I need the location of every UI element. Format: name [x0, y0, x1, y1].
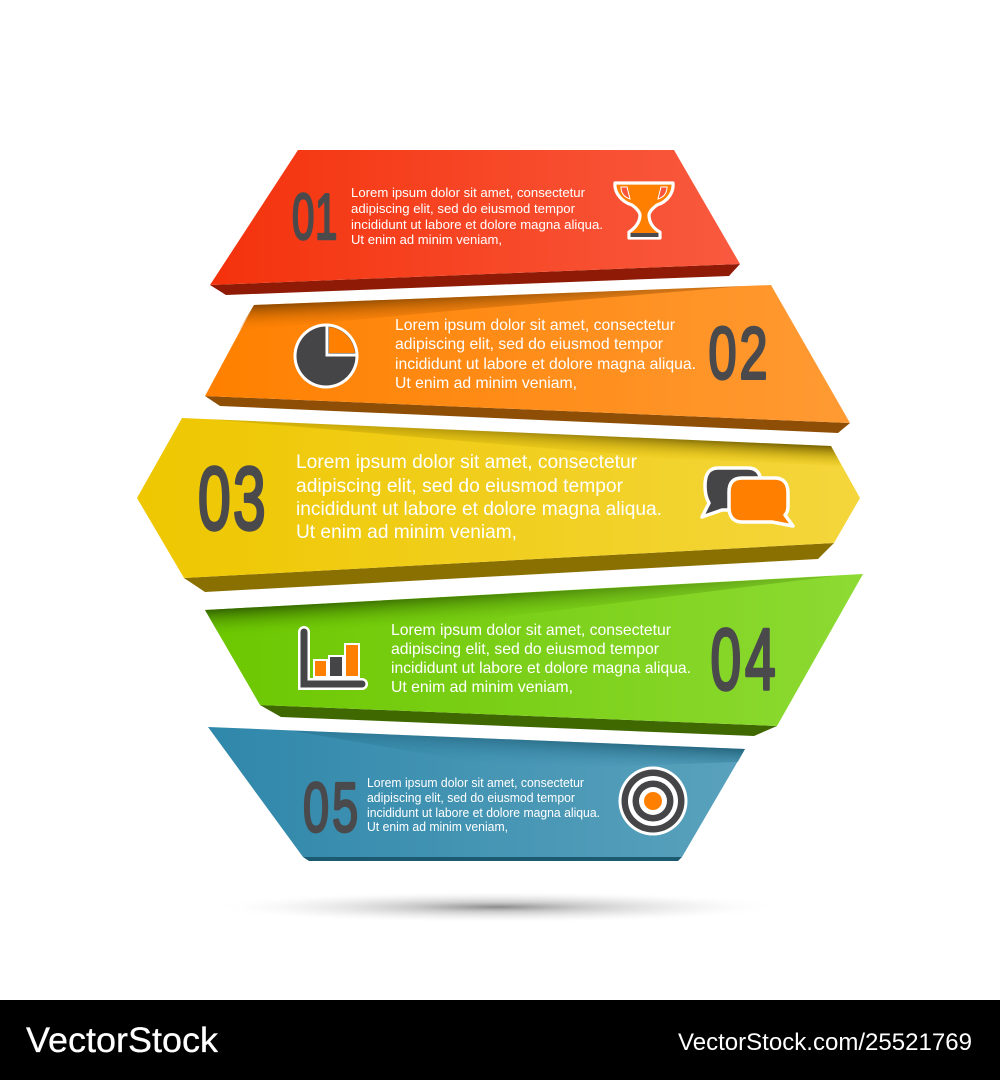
text block 02 [395, 317, 696, 392]
yellow band depth [184, 543, 834, 592]
top shadow yellow [210, 419, 842, 466]
icon: trophy [615, 183, 673, 238]
orange band face [205, 285, 850, 423]
text block 04: Ut enim ad minim veniam, [391, 679, 573, 696]
icon: target [618, 766, 688, 836]
text block 03: adipiscing elit, sed do eiusmod tempor [296, 475, 623, 497]
text block 02: adipiscing elit, sed do eiusmod tempor [395, 336, 663, 353]
text block 01: adipiscing elit, sed do eiusmod tempor [351, 201, 576, 216]
text block 01: Ut enim ad minim veniam, [351, 232, 502, 247]
ground shadow [209, 891, 785, 923]
red band depth [210, 264, 740, 295]
number 05: 05 [303, 768, 358, 847]
icon: bar chart [304, 632, 362, 684]
text block 04: incididunt ut labore et dolore magna aliqua. [391, 660, 691, 677]
panel: step 02 orange [205, 285, 850, 433]
text block 05: Lorem ipsum dolor sit amet, consectetur [367, 776, 584, 790]
text block 04 [391, 622, 691, 696]
footer url: VectorStock.com/25521769 [678, 1029, 972, 1056]
text block 02: Ut enim ad minim veniam, [395, 375, 577, 392]
icon: speech bubbles [702, 468, 793, 526]
text block 04: adipiscing elit, sed do eiusmod tempor [391, 641, 660, 658]
text block 02: incididunt ut labore et dolore magna aliqua. [395, 356, 696, 373]
text block 03 [296, 451, 662, 543]
footer bar [0, 1000, 1000, 1080]
text block 03: Lorem ipsum dolor sit amet, consectetur [296, 451, 637, 473]
text block 05: adipiscing elit, sed do eiusmod tempor [367, 791, 575, 805]
text block 01: incididunt ut labore et dolore magna aliqua. [351, 217, 603, 232]
panel: step 04 green [205, 574, 863, 736]
number 04: 04 [710, 613, 776, 708]
text block 03: Ut enim ad minim veniam, [296, 521, 517, 543]
text block 05 [367, 776, 600, 834]
panel: step 01 red [210, 150, 740, 295]
blue band depth [303, 857, 682, 861]
text block 05: incididunt ut labore et dolore magna aliqua. [367, 806, 600, 820]
blue band face [208, 727, 745, 857]
number 02: 02 [708, 313, 768, 395]
footer logo: VectorStock [26, 1021, 219, 1060]
green band depth [260, 705, 777, 736]
green band face [205, 574, 863, 726]
top shadow blue [290, 730, 745, 764]
panel: step 03 yellow [137, 418, 860, 592]
red band face [210, 150, 740, 285]
number 01: 01 [292, 181, 337, 253]
icon: pie chart [294, 324, 358, 388]
top shadow green [205, 576, 835, 640]
text block 01: Lorem ipsum dolor sit amet, consectetur [351, 185, 586, 200]
number 03: 03 [198, 449, 266, 548]
text block 04: Lorem ipsum dolor sit amet, consectetur [391, 622, 672, 639]
text block 05: Ut enim ad minim veniam, [367, 820, 508, 834]
orange band depth [205, 396, 850, 433]
top shadow orange [238, 286, 745, 331]
text block 02: Lorem ipsum dolor sit amet, consectetur [395, 317, 675, 334]
text block 03: incididunt ut labore et dolore magna aliqua. [296, 498, 662, 520]
yellow band face [137, 418, 860, 578]
panel: step 05 blue [208, 727, 745, 861]
text block 01 [351, 185, 603, 247]
